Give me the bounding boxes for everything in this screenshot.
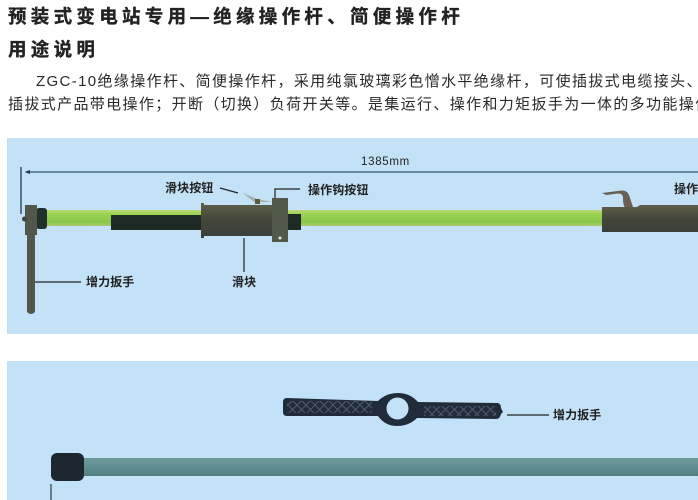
label: slider button — [165, 180, 238, 195]
label: booster wrench: 增力扳手 — [553, 407, 601, 422]
green insulating rod — [46, 210, 602, 226]
panel: assembled operating rod — [7, 138, 698, 334]
label: booster wrench — [35, 274, 134, 289]
description text: ZGC-10绝缘操作杆、简便操作杆，采用纯氯玻璃彩色憎水平绝缘杆，可使插拔式电缆接头、 — [36, 73, 698, 90]
black end cap — [51, 453, 84, 481]
dimension line 1385mm — [21, 156, 698, 214]
grey-green rod — [82, 458, 698, 476]
description text line 2: 插拔式产品带电操作；开断（切换）负荷开关等。是集运行、操作和力矩扳手为一体的多功能操作 — [8, 96, 698, 113]
black inner tube — [111, 215, 301, 230]
label: booster wrench — [507, 407, 601, 422]
label: hook button — [275, 182, 369, 198]
leader line — [50, 484, 52, 500]
slider — [201, 193, 301, 242]
label: slider: 滑块 — [232, 274, 256, 289]
label: booster wrench: 增力扳手 — [86, 274, 134, 289]
dimension line 1385mm: 1385mm — [361, 156, 410, 168]
wrench accessory — [283, 393, 503, 426]
booster wrench — [22, 205, 47, 314]
label: slider — [232, 238, 256, 289]
label: slider button: 滑块按钮 — [165, 180, 213, 195]
label: hook button: 操作钩按钮 — [308, 182, 369, 197]
label: operating partial: 操作 — [674, 181, 698, 196]
panel: simple operating rod — [7, 361, 698, 500]
subheading: usage: 用途说明 — [8, 39, 99, 60]
title: 预装式变电站专用—绝缘操作杆、简便操作杆 — [8, 6, 464, 27]
operating end with hook — [602, 190, 698, 232]
